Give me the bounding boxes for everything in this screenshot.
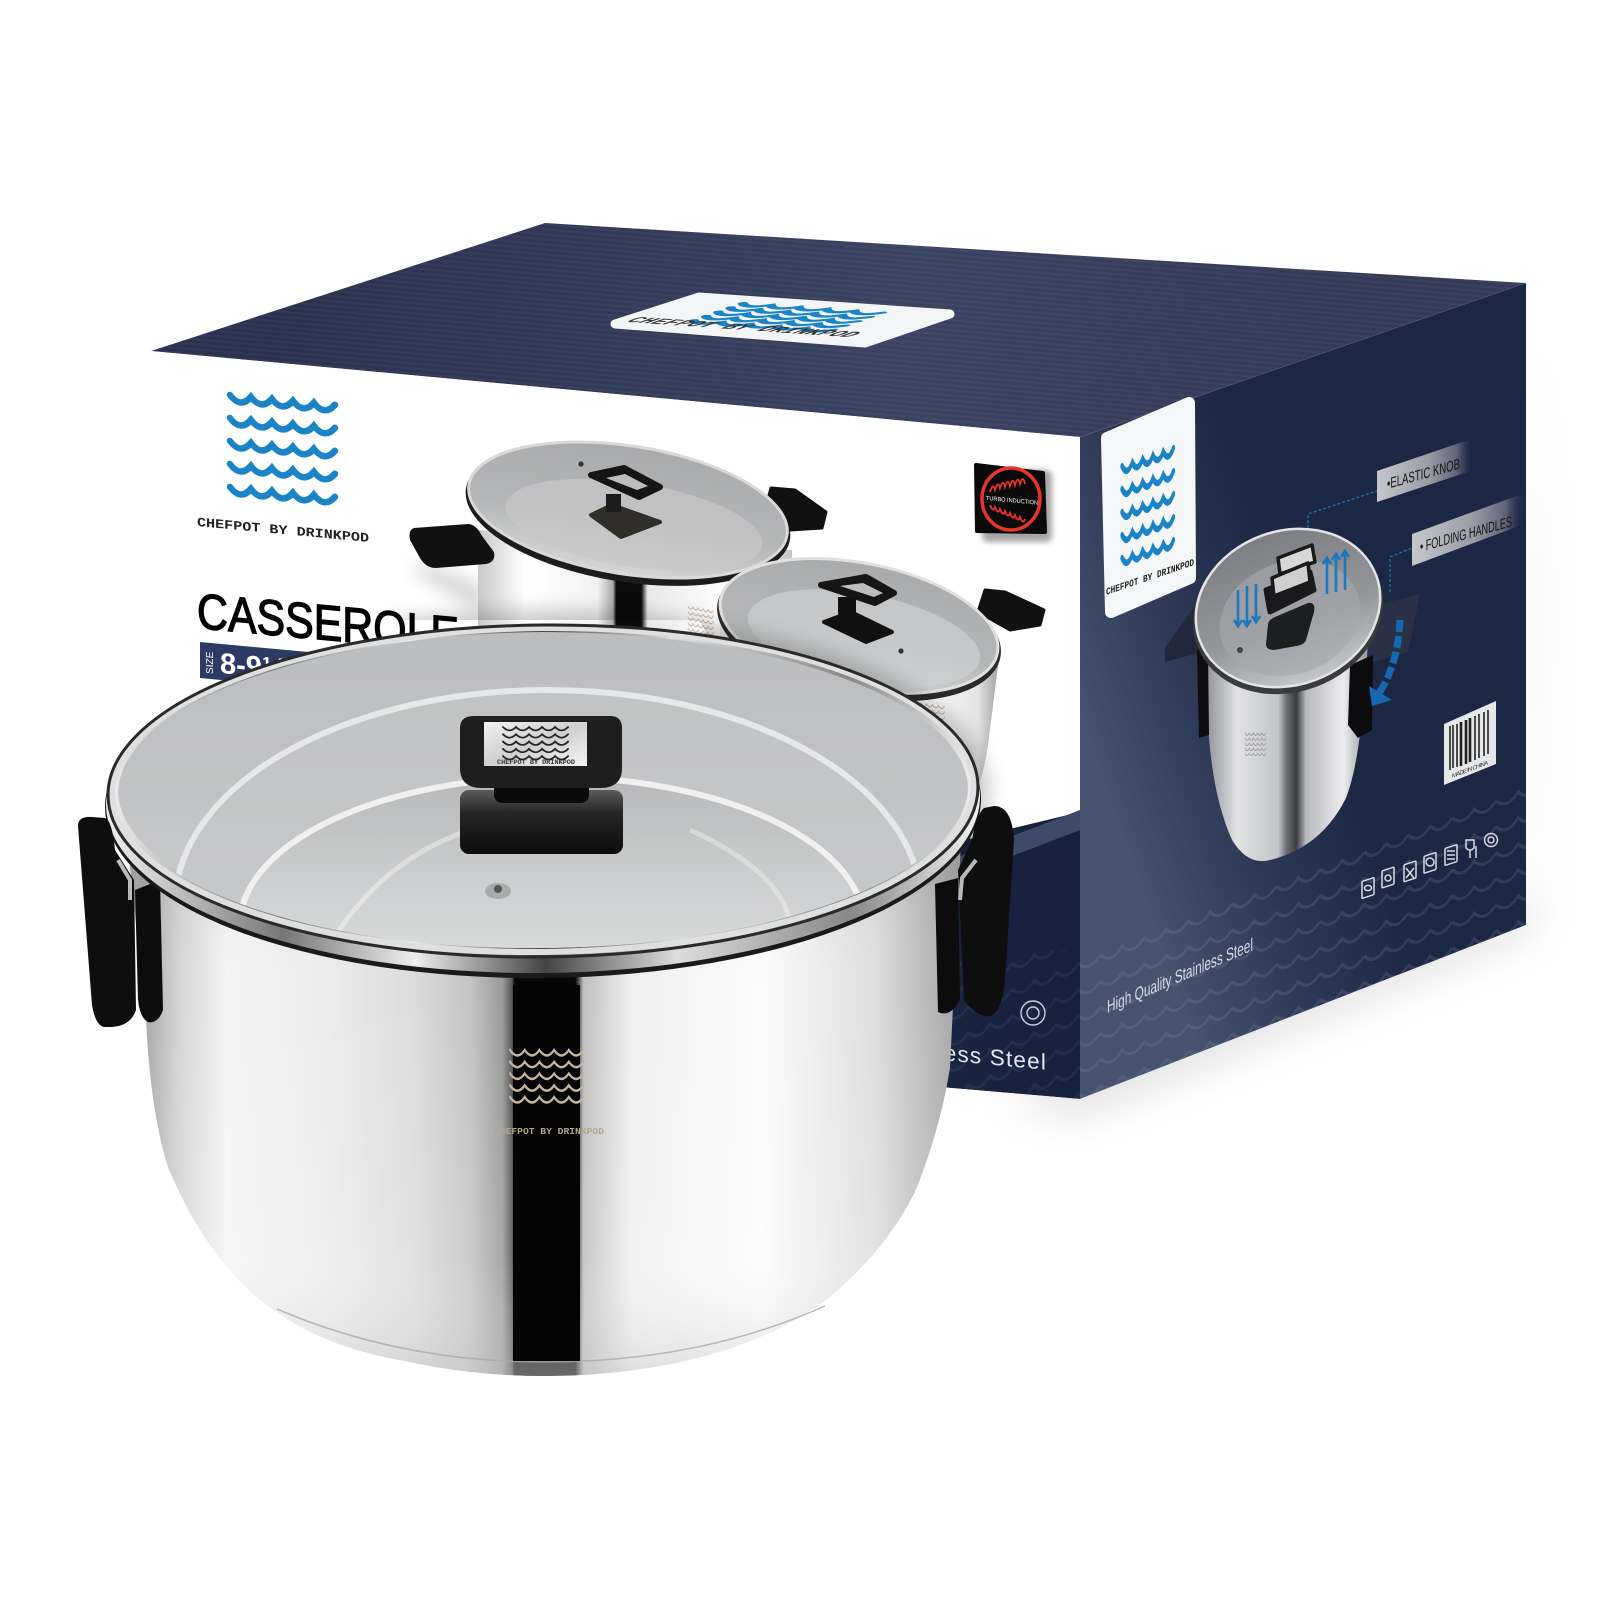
top label with logo: CHEFPOT BY DRINKPOD (617, 316, 866, 340)
rim (1169, 504, 1407, 720)
engraved logo (1245, 733, 1266, 756)
tan logo (915, 702, 944, 731)
left handle front (78, 817, 136, 1027)
knob reflection (591, 505, 660, 537)
right handle (1362, 594, 1420, 665)
knob (821, 577, 894, 603)
icon: front recycle (1021, 1001, 1045, 1025)
pot shadow on box (396, 602, 998, 857)
lid highlights (336, 831, 460, 931)
pot: main casserole (78, 620, 1014, 1376)
body (478, 530, 792, 670)
pot: side face illustration (1165, 503, 1420, 861)
icons row: care symbols (1362, 834, 1498, 898)
label: folding handles (1412, 494, 1522, 566)
box ground shadow (1000, 300, 1540, 1115)
knob (591, 468, 660, 497)
tan logo on pot A (688, 606, 713, 635)
left handle vertical (1197, 650, 1209, 738)
handle right (978, 590, 1044, 630)
brand text: front face: CHEFPOT BY DRINKPOD (197, 515, 369, 546)
blue arrows in lid (1234, 551, 1349, 626)
barcode panel (1444, 701, 1496, 785)
right handle front (958, 806, 1014, 1016)
stripe text: CHEFPOT BY DRINKPOD (494, 1126, 604, 1137)
stripe waves (510, 1050, 584, 1102)
left handle (1165, 600, 1201, 662)
vent (1237, 647, 1243, 653)
text: front tagline: High Quality Stainless Steel (736, 1021, 1047, 1075)
heading: CASSEROLE: CASSEROLE (197, 583, 459, 663)
knob waves (503, 727, 568, 760)
icon: recycle (1484, 834, 1498, 846)
glass lid (118, 632, 968, 948)
knob reflection (824, 612, 892, 642)
front navy band (946, 815, 1080, 1099)
outer lid ring (176, 687, 916, 948)
icon: induction (1362, 878, 1374, 898)
size tag: 8-9¼ (220, 648, 289, 686)
logo: front face waves (230, 395, 335, 503)
front lighter stripe (960, 810, 1080, 866)
left bracket (118, 860, 130, 900)
base lip (277, 1306, 825, 1362)
body (125, 820, 962, 1376)
icon: electric (1445, 845, 1457, 865)
black stripe (513, 985, 580, 1361)
pot: rear small pot A (410, 421, 826, 670)
icon: dishwasher safe glass and fork (1466, 840, 1476, 858)
label: elastic knob: •ELASTIC KNOB (1387, 456, 1460, 493)
size tag (200, 642, 330, 690)
knob reflection (1266, 603, 1314, 650)
knob (1266, 572, 1314, 612)
rim and lid (455, 421, 801, 607)
icon: ceramic (1424, 852, 1436, 873)
panel: box right side face (1080, 283, 1526, 1099)
size tag: SIZE (205, 651, 216, 674)
left handle rear bar (135, 880, 163, 1022)
leader lines (1308, 491, 1412, 592)
glass edge (110, 623, 976, 957)
side logo panel (1106, 403, 1194, 612)
body (720, 625, 1000, 850)
label: elastic knob (1377, 439, 1471, 502)
side logo waves (1122, 448, 1173, 564)
handle right (765, 488, 826, 530)
knob (460, 716, 622, 788)
vent (485, 883, 511, 899)
vent (578, 461, 584, 467)
panel: box top face (151, 223, 1526, 437)
icon: turbo induction badge: TURBO INDUCTION (986, 496, 1038, 507)
side brand text: CHEFPOT BY DRINKPOD (1106, 557, 1194, 599)
rim and lid (705, 537, 1013, 723)
chrome rim (103, 623, 983, 983)
knob reflection (460, 790, 623, 854)
product scene: casserole box and pot (78, 223, 1538, 1376)
right handle vertical (1348, 655, 1373, 738)
right bracket (960, 860, 976, 900)
right handle rear bar (935, 878, 960, 1014)
knob stem (494, 775, 589, 803)
wave band (1080, 772, 1526, 1099)
panel: box front face (151, 351, 1080, 1100)
folding arrow (1369, 620, 1400, 706)
bottom wave tint (950, 950, 1080, 1098)
label: folding handles: • FOLDING HANDLES (1420, 513, 1512, 556)
vent (898, 648, 904, 654)
top label with logo (615, 297, 950, 343)
barcode panel: MADE IN CHINA (1452, 759, 1489, 780)
knob text: CHEFPOT BY DRINKPOD (497, 759, 575, 766)
handle left (410, 524, 494, 568)
knob steel plate (484, 722, 587, 766)
body (1201, 590, 1370, 861)
icon: halogen (1404, 861, 1416, 882)
icon: gas (1382, 867, 1394, 888)
icon: turbo induction badge (976, 465, 1052, 542)
text: side tagline: High Quality Stainless Steel (1107, 934, 1253, 1017)
pot: rear small pot B (705, 537, 1044, 850)
inner lid ring (240, 778, 860, 948)
